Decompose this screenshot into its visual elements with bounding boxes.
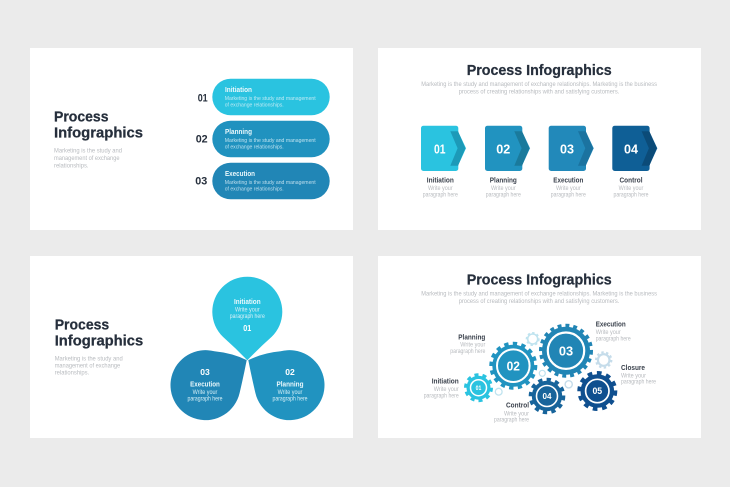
step 02 drop: Write your: [278, 389, 303, 396]
step 01 arrow square: Initiation: [427, 177, 454, 184]
step 03 arrow square: Write your: [556, 185, 581, 192]
step 01 pill: of exchange relationships.: [225, 102, 284, 108]
gear 05: 05: [592, 386, 602, 396]
label: Execution: [596, 322, 631, 343]
label: Initiation: paragraph here: [424, 393, 459, 400]
panel: stacked pills: [30, 48, 353, 230]
panel: gears: [378, 256, 701, 438]
text block: panel 3 description: Marketing is the study and: [55, 355, 123, 362]
panel: arrow squares: [378, 48, 701, 230]
step 02 drop: Planning: [276, 381, 304, 388]
label: Closure: Write your: [621, 372, 647, 379]
gear 02: 02: [507, 359, 520, 373]
text block: panel 1 description: [54, 148, 122, 169]
heading: panel 3 title: [55, 316, 143, 350]
step 01 arrow square: 01: [434, 142, 445, 156]
text block: panel 1 description: relationships.: [54, 162, 89, 169]
step 03 arrow square: paragraph here: [551, 192, 586, 198]
step 02 arrow square: Planning: [490, 177, 517, 184]
label: Closure: Closure: [621, 365, 645, 372]
step 02 drop: paragraph here: [272, 395, 308, 402]
label: Closure: [621, 365, 656, 386]
icon: small ring centre: [539, 370, 545, 376]
step 02 pill: Planning: [225, 129, 252, 136]
text block: panel 1 description: Marketing is the study and: [54, 148, 122, 155]
text block: panel 2 description: Marketing is the study and management of exchange relationships. Marketing is the business: [421, 81, 657, 88]
step 02 pill: Marketing is the study and management: [225, 138, 316, 144]
step 02 arrow square: [485, 126, 530, 198]
step 03 arrow square: [549, 126, 594, 198]
gear 04: [530, 379, 564, 413]
step 03 arrow square: Execution: [553, 177, 583, 184]
gear 03: 03: [559, 344, 573, 358]
step 02 arrow square: 02: [496, 142, 510, 156]
heading: panel 3 title: Process: [55, 316, 109, 333]
step 01 drop: [212, 277, 282, 360]
gear 05: [579, 373, 616, 409]
step 03 drop: [170, 350, 247, 420]
gear 01: 01: [476, 386, 482, 392]
step 01 pill: [198, 79, 330, 115]
icon: small ring left: [495, 388, 502, 395]
step 03 drop: 03: [200, 368, 210, 377]
label: Planning: paragraph here: [450, 348, 486, 355]
step 02 pill: 02: [196, 134, 208, 146]
gear 04: 04: [542, 392, 552, 401]
text block: panel 4 description: process of creating relationships with and satisfying customers.: [459, 298, 619, 305]
label: Planning: [450, 334, 486, 355]
label: Execution: Execution: [596, 322, 626, 329]
text block: panel 4 description: Marketing is the study and management of exchange relationships. Marketing is the business: [421, 290, 657, 298]
label: Control: paragraph here: [494, 417, 529, 424]
step 02 drop: 02: [285, 368, 295, 377]
step 03 pill: 03: [195, 175, 207, 187]
heading: panel 1 title: Infographics: [54, 125, 143, 142]
step 01 drop: paragraph here: [230, 313, 265, 320]
label: Execution: Write your: [596, 329, 621, 336]
step 03 pill: [195, 163, 330, 199]
step 03 pill: Marketing is the study and management: [225, 180, 316, 186]
step 04 arrow square: paragraph here: [614, 192, 649, 198]
heading: panel 2 title: Process Infographics: [467, 62, 612, 79]
step 03 pill: Execution: [225, 171, 255, 178]
step 04 arrow square: Control: [620, 177, 643, 184]
gear 03: [541, 326, 591, 376]
label: Planning: Write your: [460, 341, 486, 348]
step 03 drop: paragraph here: [188, 395, 223, 402]
label: Control: Write your: [504, 410, 530, 417]
step 03 pill: of exchange relationships.: [225, 186, 284, 192]
heading: panel 3 title: Infographics: [55, 332, 143, 350]
step 01 arrow square: paragraph here: [423, 192, 458, 198]
step 04 arrow square: [612, 126, 657, 198]
label: Initiation: Initiation: [432, 379, 459, 386]
text block: panel 3 description: relationships.: [55, 370, 89, 377]
text block: panel 4 description: [421, 290, 657, 305]
step 03 drop: Write your: [193, 389, 218, 396]
step 01 pill: Initiation: [225, 87, 252, 94]
icon: small light gear right: [596, 352, 611, 368]
step 01 pill: Marketing is the study and management: [225, 96, 316, 102]
step 02 pill: [196, 121, 330, 157]
label: Closure: paragraph here: [621, 379, 656, 386]
gear 01: [466, 375, 492, 401]
text block: panel 2 description: process of creating relationships with and satisfying customers.: [459, 88, 619, 95]
gear 02: [491, 344, 536, 388]
heading: panel 1 title: [54, 109, 143, 142]
label: Planning: Planning: [458, 334, 485, 341]
panel: three drops: [30, 256, 353, 438]
step 01 arrow square: [421, 126, 466, 198]
step 01 drop: Initiation: [234, 299, 261, 306]
text block: panel 1 description: management of exchange: [54, 155, 120, 162]
step 02 pill: of exchange relationships.: [225, 144, 284, 150]
step 02 drop: [248, 350, 325, 420]
label: Control: [494, 403, 530, 424]
step 03 drop: Execution: [190, 381, 220, 388]
icon: small ring lower: [565, 381, 572, 388]
label: Initiation: [424, 379, 459, 400]
step 01 arrow square: Write your: [428, 185, 453, 192]
step 04 arrow square: 04: [624, 142, 638, 156]
label: Initiation: Write your: [434, 386, 459, 393]
text block: panel 2 description: [421, 81, 657, 95]
heading: panel 1 title: Process: [54, 109, 108, 126]
heading: panel 4 title: Process Infographics: [467, 272, 612, 288]
step 02 arrow square: paragraph here: [486, 192, 521, 198]
text block: panel 3 description: management of exchange: [55, 362, 121, 370]
step 01 drop: 01: [243, 324, 252, 333]
step 04 arrow square: Write your: [619, 185, 644, 192]
text block: panel 3 description: [55, 355, 123, 377]
label: Control: Control: [506, 403, 529, 410]
step 01 drop: Write your: [235, 307, 260, 314]
icon: small light gear top: [526, 333, 539, 345]
step 01 pill: 01: [198, 93, 208, 105]
step 02 arrow square: Write your: [491, 185, 516, 192]
label: Execution: paragraph here: [596, 336, 631, 343]
step 03 arrow square: 03: [560, 142, 574, 156]
